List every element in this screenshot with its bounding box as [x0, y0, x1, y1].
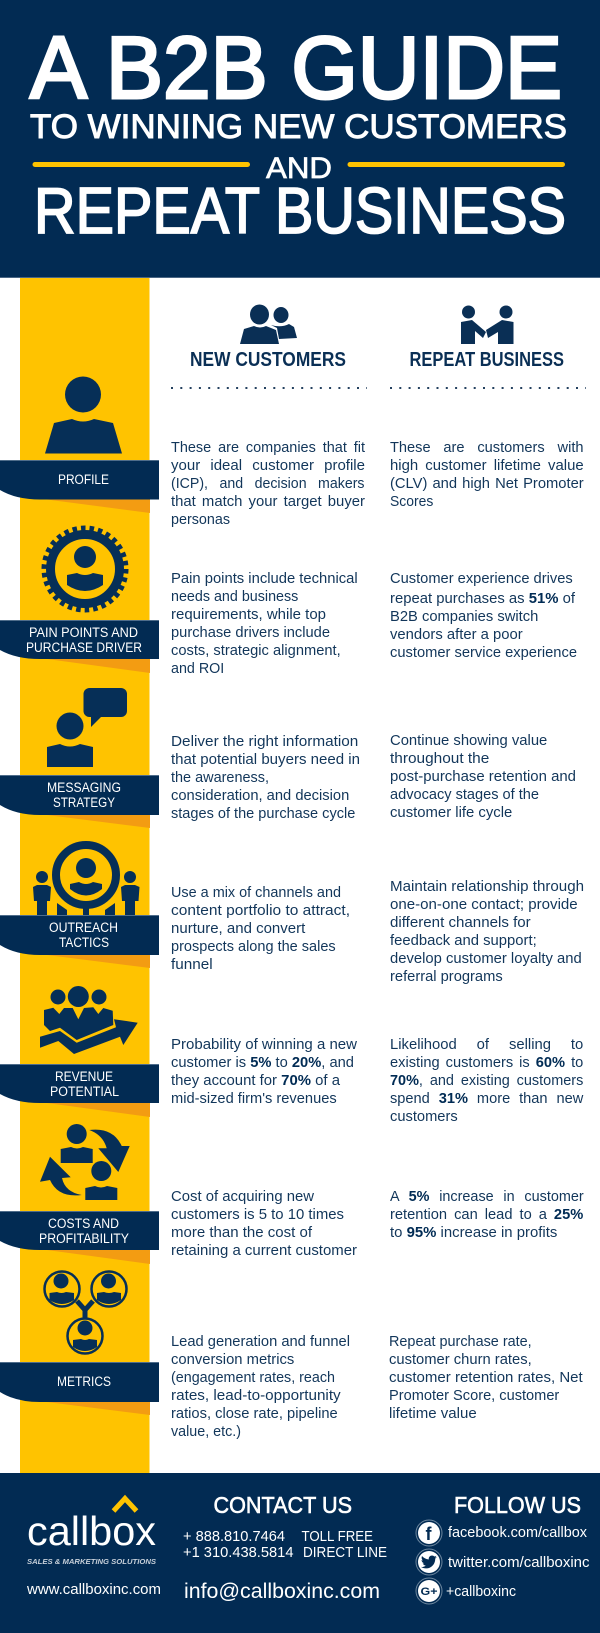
- text: repeat business revenue: Likelihood of selling to: [390, 1036, 583, 1053]
- heading: contact us: CONTACT US: [214, 1492, 352, 1518]
- text: new customers messaging: the awareness,: [171, 769, 269, 786]
- text: new customers messaging: that potential buyers need in: [171, 751, 360, 768]
- contact details: info@callboxinc.com: [184, 1580, 380, 1603]
- text: new customers profile: that match your target buyer: [171, 493, 365, 510]
- text: new customers profile: personas: [171, 511, 230, 528]
- label ribbon: outreach tactics: TACTICS: [59, 935, 109, 950]
- text: new customers profile: (ICP), and decision makers: [171, 475, 364, 492]
- icon: facebook: f: [426, 1524, 432, 1544]
- contact details: +1 310.438.5814: [183, 1544, 294, 1561]
- icon: speaker with speech bubble: [47, 688, 127, 767]
- icon: google plus: G+: [420, 1586, 438, 1598]
- yellow sidebar: [20, 278, 150, 1473]
- text: repeat business revenue: existing customers is 60% to: [390, 1054, 583, 1071]
- text: new customers messaging: Deliver the right information: [171, 733, 358, 750]
- text: new customers pain points: [171, 570, 358, 677]
- text: repeat business metrics: Promoter Score, customer: [389, 1387, 559, 1404]
- text: repeat business pain points: Customer experience drives: [390, 570, 573, 587]
- text: new customers revenue: customer is 5% to 20%, and: [171, 1054, 354, 1071]
- icon: magnifier over people: [33, 845, 140, 916]
- row: messaging strategy: [0, 688, 576, 828]
- heading: follow us: FOLLOW US: [454, 1492, 581, 1518]
- label ribbon: outreach tactics: [0, 915, 159, 968]
- text: new customers costs: retaining a current customer: [171, 1242, 357, 1259]
- row: revenue potential: [0, 986, 583, 1125]
- column header: repeat business: [390, 306, 586, 388]
- text: repeat business messaging: post-purchase retention and: [390, 768, 576, 785]
- text: repeat business pain points: repeat purchases as 51% of: [390, 590, 576, 607]
- text: repeat business outreach: different channels for: [390, 914, 531, 931]
- text: new customers revenue: Probability of winning a new: [171, 1036, 357, 1053]
- icon: team with rising arrow: [40, 986, 138, 1054]
- row: pain points: [0, 528, 577, 677]
- text: repeat business metrics: [389, 1333, 584, 1422]
- text: repeat business costs: A 5% increase in customer: [390, 1188, 584, 1205]
- text: repeat business metrics: Repeat purchase rate,: [389, 1333, 532, 1350]
- text: new customers messaging: stages of the purchase cycle: [171, 805, 355, 822]
- heading: new customers: NEW CUSTOMERS: [190, 349, 346, 371]
- label ribbon: pain points: PAIN POINTS AND: [29, 625, 138, 640]
- header banner: [0, 0, 600, 278]
- row: costs and profitability: [0, 1124, 584, 1264]
- icon: handshake: [461, 306, 514, 344]
- text: repeat business messaging: [390, 732, 576, 821]
- text: repeat business pain points: vendors after a poor: [390, 626, 523, 643]
- text: new customers costs: [171, 1188, 357, 1259]
- text: new customers pain points: needs and business: [171, 588, 298, 605]
- text: repeat business profile: high customer lifetime value: [390, 457, 584, 474]
- text: new customers metrics: rates, lead-to-opportunity: [171, 1387, 341, 1404]
- text: repeat business profile: (CLV) and high Net Promoter: [390, 475, 584, 492]
- text: new customers profile: your ideal customer profile: [171, 457, 365, 474]
- social links: +callboxinc: [446, 1584, 516, 1600]
- label ribbon: pain points: PURCHASE DRIVER: [26, 640, 142, 655]
- text: new customers costs: Cost of acquiring new: [171, 1188, 314, 1205]
- text: repeat business messaging: throughout the: [390, 750, 489, 767]
- text: repeat business pain points: [390, 570, 577, 661]
- text: repeat business metrics: customer retention rates, Net: [389, 1369, 584, 1386]
- heading: repeat business: REPEAT BUSINESS: [410, 349, 564, 371]
- text: repeat business metrics: lifetime value: [389, 1405, 477, 1422]
- contact details: + 888.810.7464: [183, 1528, 285, 1545]
- row: profile: [0, 376, 584, 528]
- text: new customers metrics: conversion metrics: [171, 1351, 294, 1368]
- text: new customers pain points: purchase drivers include: [171, 624, 330, 641]
- label ribbon: messaging strategy: STRATEGY: [53, 795, 115, 810]
- text: repeat business outreach: Maintain relationship through: [390, 878, 584, 895]
- social links: facebook.com/callbox: [448, 1525, 588, 1541]
- text: new customers costs: more than the cost of: [171, 1224, 313, 1241]
- label ribbon: messaging strategy: [0, 775, 159, 828]
- text: repeat business pain points: customer service experience: [390, 644, 577, 661]
- label ribbon: profile: [0, 460, 159, 513]
- text: repeat business messaging: Continue showing value: [390, 732, 547, 749]
- text: new customers profile: [171, 439, 366, 528]
- divider right: [348, 162, 565, 167]
- text: new customers revenue: mid-sized firm's revenues: [171, 1090, 337, 1107]
- contact details: TOLL FREE: [302, 1528, 373, 1545]
- logo: callbox: [27, 1498, 157, 1566]
- icon: gear with person: [44, 528, 126, 610]
- row: outreach tactics: [0, 845, 584, 985]
- text: repeat business revenue: spend 31% more than new: [390, 1090, 583, 1107]
- text: repeat business messaging: customer life cycle: [390, 804, 512, 821]
- social links: [416, 1492, 590, 1604]
- column header: new customers: [171, 304, 367, 388]
- text: repeat business outreach: referral programs: [390, 968, 503, 985]
- text: new customers messaging: consideration, and decision: [171, 787, 349, 804]
- label ribbon: revenue potential: [0, 1064, 159, 1117]
- contact details: DIRECT LINE: [303, 1544, 387, 1561]
- text: repeat business revenue: 70%, and existing customers: [390, 1072, 583, 1089]
- label ribbon: revenue potential: REVENUE: [55, 1069, 113, 1084]
- text: repeat business metrics: customer churn rates,: [389, 1351, 532, 1368]
- text: repeat business outreach: [390, 878, 584, 985]
- text: new customers outreach: Use a mix of channels and: [171, 884, 341, 901]
- text: repeat business revenue: customers: [390, 1108, 458, 1125]
- website: www.callboxinc.com: [26, 1582, 161, 1598]
- dotted rule: [171, 387, 367, 389]
- label ribbon: costs and profitability: COSTS AND: [48, 1216, 119, 1231]
- word: and: AND: [266, 152, 332, 185]
- text: new customers metrics: [171, 1333, 350, 1440]
- text: new customers outreach: prospects along the sales: [171, 938, 336, 955]
- text: new customers metrics: value, etc.): [171, 1423, 241, 1440]
- row: metrics: [0, 1272, 584, 1440]
- icon: google plus: [416, 1578, 442, 1604]
- text: repeat business profile: Scores: [390, 493, 433, 510]
- social links: twitter.com/callboxinc: [448, 1555, 590, 1571]
- text: repeat business revenue: [390, 1036, 583, 1125]
- text: new customers outreach: funnel: [171, 956, 213, 973]
- text: repeat business costs: retention can lead to a 25%: [390, 1206, 583, 1223]
- text: new customers pain points: and ROI: [171, 660, 224, 677]
- text: new customers metrics: (engagement rates, reach: [171, 1369, 335, 1386]
- subtitle: to winning new customers: TO WINNING NEW CUSTOMERS: [30, 108, 567, 146]
- text: repeat business costs: [390, 1188, 584, 1241]
- text: repeat business profile: [390, 439, 584, 510]
- text: new customers pain points: Pain points include technical: [171, 570, 358, 587]
- label ribbon: metrics: METRICS: [57, 1374, 111, 1389]
- icon: twitter: [416, 1549, 442, 1575]
- label ribbon: outreach tactics: OUTREACH: [49, 920, 118, 935]
- text: new customers revenue: [171, 1036, 357, 1107]
- text: new customers outreach: content portfolio to attract,: [171, 902, 350, 919]
- text: new customers revenue: they account for 70% of a: [171, 1072, 341, 1089]
- text: repeat business costs: to 95% increase in profits: [390, 1224, 557, 1241]
- label ribbon: costs and profitability: [0, 1211, 159, 1264]
- text: new customers pain points: costs, strategic alignment,: [171, 642, 341, 659]
- dotted rule: [390, 387, 586, 389]
- text: new customers messaging: [171, 733, 360, 822]
- icon: profile person: [45, 376, 122, 454]
- text: repeat business outreach: feedback and support;: [390, 932, 537, 949]
- text: new customers pain points: requirements, while top: [171, 606, 326, 623]
- icon: people exchange cycle: [40, 1124, 130, 1200]
- contact details: [183, 1492, 387, 1603]
- text: repeat business messaging: advocacy stages of the: [390, 786, 539, 803]
- text: repeat business pain points: B2B companies switch: [390, 608, 538, 625]
- text: new customers outreach: [171, 884, 350, 973]
- label ribbon: metrics: [0, 1362, 159, 1415]
- label ribbon: costs and profitability: PROFITABILITY: [39, 1231, 129, 1246]
- icon: facebook: [416, 1520, 442, 1546]
- icon: connected people: [44, 1272, 126, 1354]
- label ribbon: revenue potential: POTENTIAL: [50, 1084, 119, 1099]
- text: repeat business outreach: develop customer loyalty and: [390, 950, 582, 967]
- title: A B2B Guide: A B2B GUIDE: [30, 18, 562, 117]
- label ribbon: messaging strategy: MESSAGING: [47, 780, 121, 795]
- logo: callbox: callbox: [27, 1508, 157, 1554]
- text: new customers outreach: nurture, and convert: [171, 920, 306, 937]
- text: new customers metrics: Lead generation and funnel: [171, 1333, 350, 1350]
- label ribbon: pain points: [0, 620, 159, 673]
- text: new customers profile: These are companies that fit: [171, 439, 366, 456]
- label ribbon: profile: PROFILE: [58, 472, 109, 487]
- icon: customers: [240, 304, 297, 344]
- logo: callbox: SALES & MARKETING SOLUTIONS: [27, 1557, 156, 1566]
- footer panel: [0, 1473, 600, 1633]
- divider left: [32, 162, 250, 167]
- text: repeat business outreach: one-on-one contact; provide: [390, 896, 578, 913]
- text: new customers costs: customers is 5 to 10 times: [171, 1206, 344, 1223]
- text: repeat business profile: These are customers with: [390, 439, 584, 456]
- text: new customers metrics: ratios, close rate, pipeline: [171, 1405, 338, 1422]
